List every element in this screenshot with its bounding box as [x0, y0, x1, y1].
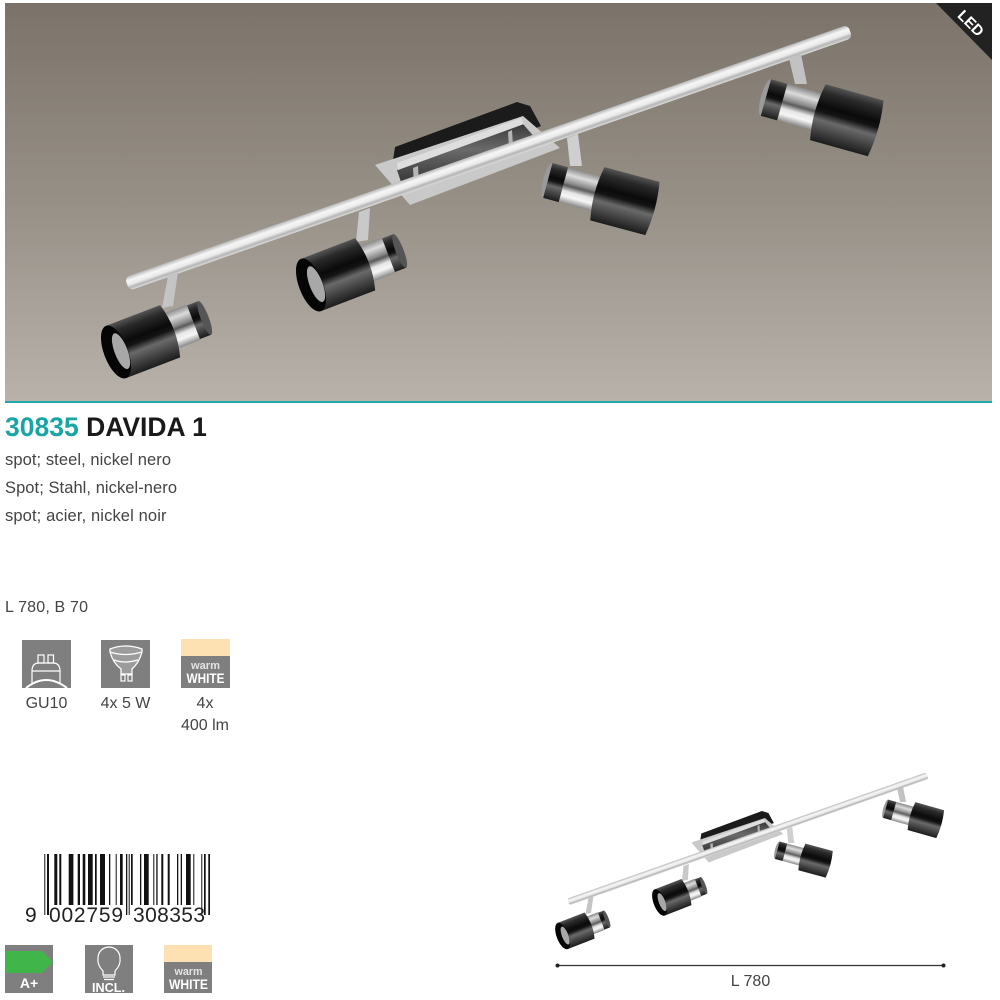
icon: reflector bulb [101, 640, 150, 688]
title: 30835 DAVIDA 1 [5, 412, 207, 442]
icon: warm white: warm [190, 660, 220, 672]
icon: warm white [181, 639, 230, 688]
icon: bulb included [85, 945, 133, 995]
label: 4x 400 lm: 4x [197, 695, 213, 712]
text: dimensions: L 780, B 70 [5, 599, 88, 616]
icon: warm white: WHITE [186, 670, 224, 686]
badge: LED corner [936, 3, 992, 60]
icon: warm white (footer): WHITE [169, 976, 208, 992]
icon: warm white (footer): warm [174, 966, 203, 978]
icon: GU10 socket [22, 640, 71, 688]
text block: material descriptions: spot; steel, nickel nero [5, 451, 171, 469]
barcode: 9 [25, 904, 37, 927]
product image: ceiling spotlight [95, 25, 886, 382]
icon: warm white (footer) [164, 945, 212, 993]
icon: energy class A+: A+ [20, 975, 38, 991]
label: 4x 5 W: 4x 5 W [101, 695, 151, 712]
text block: material descriptions [5, 451, 177, 525]
barcode: 308353 [133, 904, 205, 927]
barcode: 002759 [49, 904, 123, 927]
label: L 780: L 780 [731, 973, 770, 990]
technical drawing: small product image [552, 772, 945, 951]
icon: energy class A+ [5, 945, 53, 993]
barcode [25, 854, 210, 927]
badge: LED corner: LED [954, 7, 987, 40]
icon: bulb included: INCL. [92, 980, 125, 995]
text block: material descriptions: spot; acier, nickel noir [5, 507, 167, 525]
panel: product photo [5, 3, 992, 403]
dimension line [556, 964, 946, 968]
label: GU10: GU10 [26, 695, 68, 712]
label: 4x 400 lm [181, 695, 229, 734]
label: 4x 400 lm: 400 lm [181, 717, 229, 734]
text block: material descriptions: Spot; Stahl, nickel-nero [5, 479, 177, 497]
